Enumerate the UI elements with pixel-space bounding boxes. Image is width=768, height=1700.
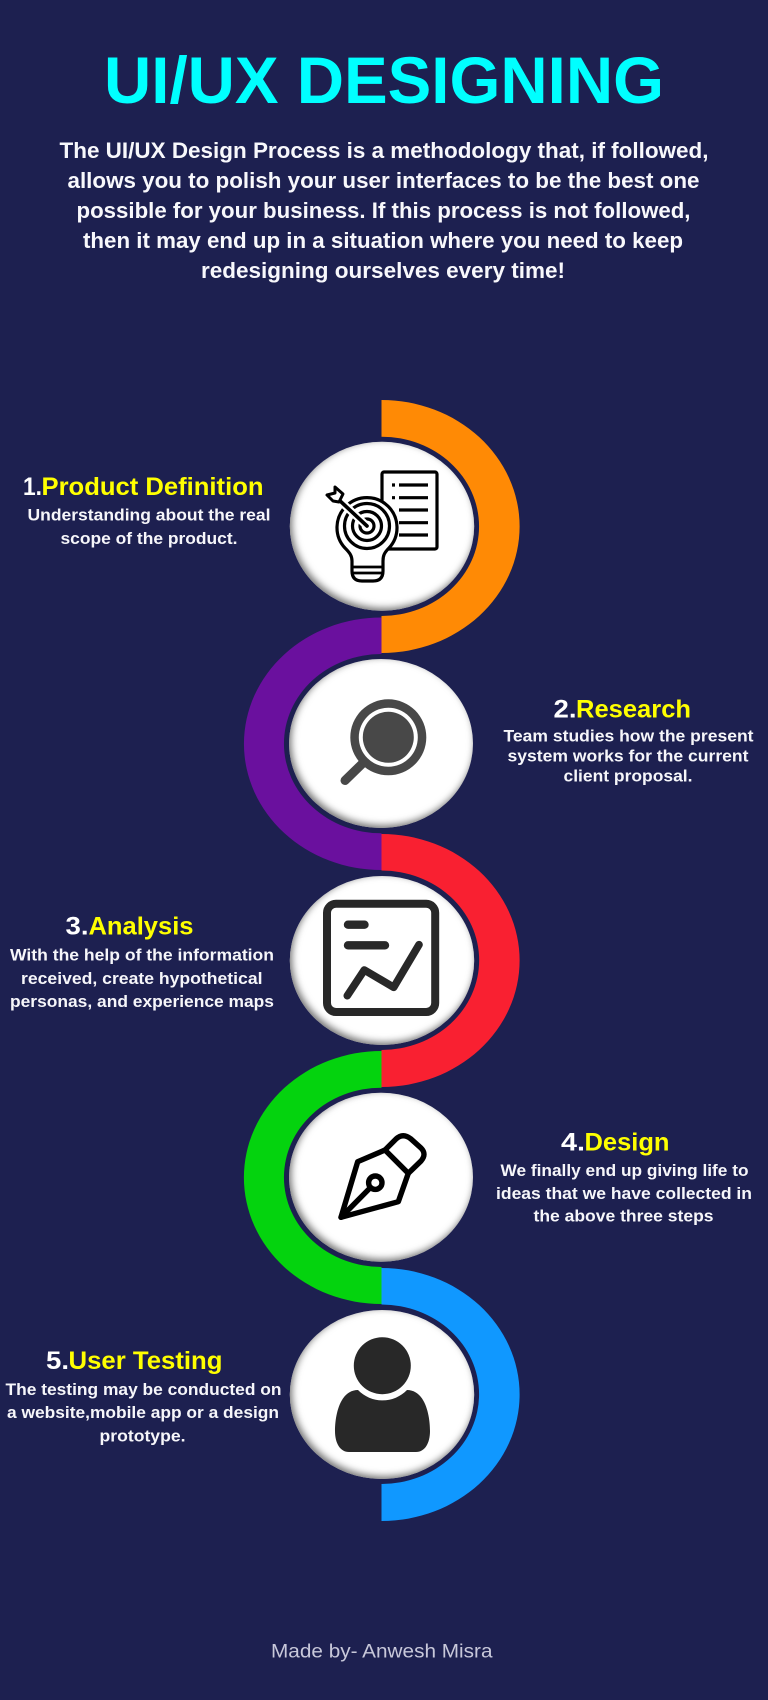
- label: step 3: 3.: [66, 912, 88, 940]
- intro text block: allows you to polish your user interfaces to be the best one: [68, 168, 700, 193]
- label: step 4: the above three steps: [534, 1207, 714, 1226]
- label: step 2: [504, 695, 754, 786]
- label: step 5: The testing may be conducted on: [6, 1380, 282, 1399]
- label: step 1: Understanding about the real: [28, 506, 270, 525]
- step 1 circle: [290, 442, 474, 611]
- footer credit: Made by- Anwesh Misra: [271, 1641, 493, 1663]
- label: step 5: 5.: [46, 1347, 69, 1375]
- label: step 1: [23, 473, 270, 548]
- step 2 circle: [289, 659, 473, 828]
- intro text block: then it may end up in a situation where you need to keep: [83, 228, 683, 253]
- step 4 circle: [289, 1093, 473, 1262]
- label: step 4: ideas that we have collected in: [496, 1184, 752, 1203]
- label: step 1: Product Definition: [42, 473, 264, 501]
- label: step 2: system works for the current: [508, 747, 749, 766]
- label: step 2: client proposal.: [564, 767, 692, 786]
- intro text block: [60, 138, 708, 283]
- label: step 5: [6, 1347, 282, 1446]
- arc: red: [382, 834, 520, 1087]
- label: step 2: Research: [576, 695, 691, 723]
- intro text block: possible for your business. If this process is not followed,: [76, 198, 690, 223]
- intro text block: redesigning ourselves every time!: [201, 258, 565, 283]
- step 3 circle: [290, 876, 474, 1045]
- arc: green: [244, 1051, 382, 1304]
- label: step 4: 4.: [561, 1129, 585, 1157]
- icon: target bulb and document: [327, 472, 437, 581]
- label: step 3: received, create hypothetical: [21, 969, 262, 988]
- label: step 4: Design: [584, 1129, 670, 1157]
- icon: pen nib: [341, 1136, 424, 1217]
- label: step 3: Analysis: [88, 912, 194, 940]
- step 5 circle: [290, 1310, 474, 1479]
- icon: chart document: [327, 904, 435, 1012]
- label: step 3: [10, 912, 274, 1011]
- arc: purple: [244, 618, 382, 870]
- label: step 5: a website,mobile app or a design: [7, 1403, 279, 1422]
- title: UI/UX DESIGNING: [104, 43, 664, 117]
- label: step 4: [496, 1129, 752, 1226]
- label: step 1: scope of the product.: [60, 529, 237, 548]
- arc: blue: [382, 1268, 520, 1521]
- label: step 4: We finally end up giving life to: [500, 1161, 748, 1180]
- icon: user: [335, 1337, 430, 1452]
- label: step 5: prototype.: [100, 1426, 186, 1446]
- intro text block: The UI/UX Design Process is a methodology that, if followed,: [60, 138, 708, 163]
- arc: orange: [382, 400, 520, 653]
- label: step 2: 2.: [554, 695, 576, 723]
- label: step 1: 1.: [23, 473, 42, 501]
- label: step 5: User Testing: [68, 1347, 222, 1375]
- label: step 2: Team studies how the present: [504, 727, 754, 746]
- label: step 3: With the help of the information: [10, 946, 274, 965]
- icon: magnifier: [345, 699, 426, 780]
- label: step 3: personas, and experience maps: [10, 992, 274, 1011]
